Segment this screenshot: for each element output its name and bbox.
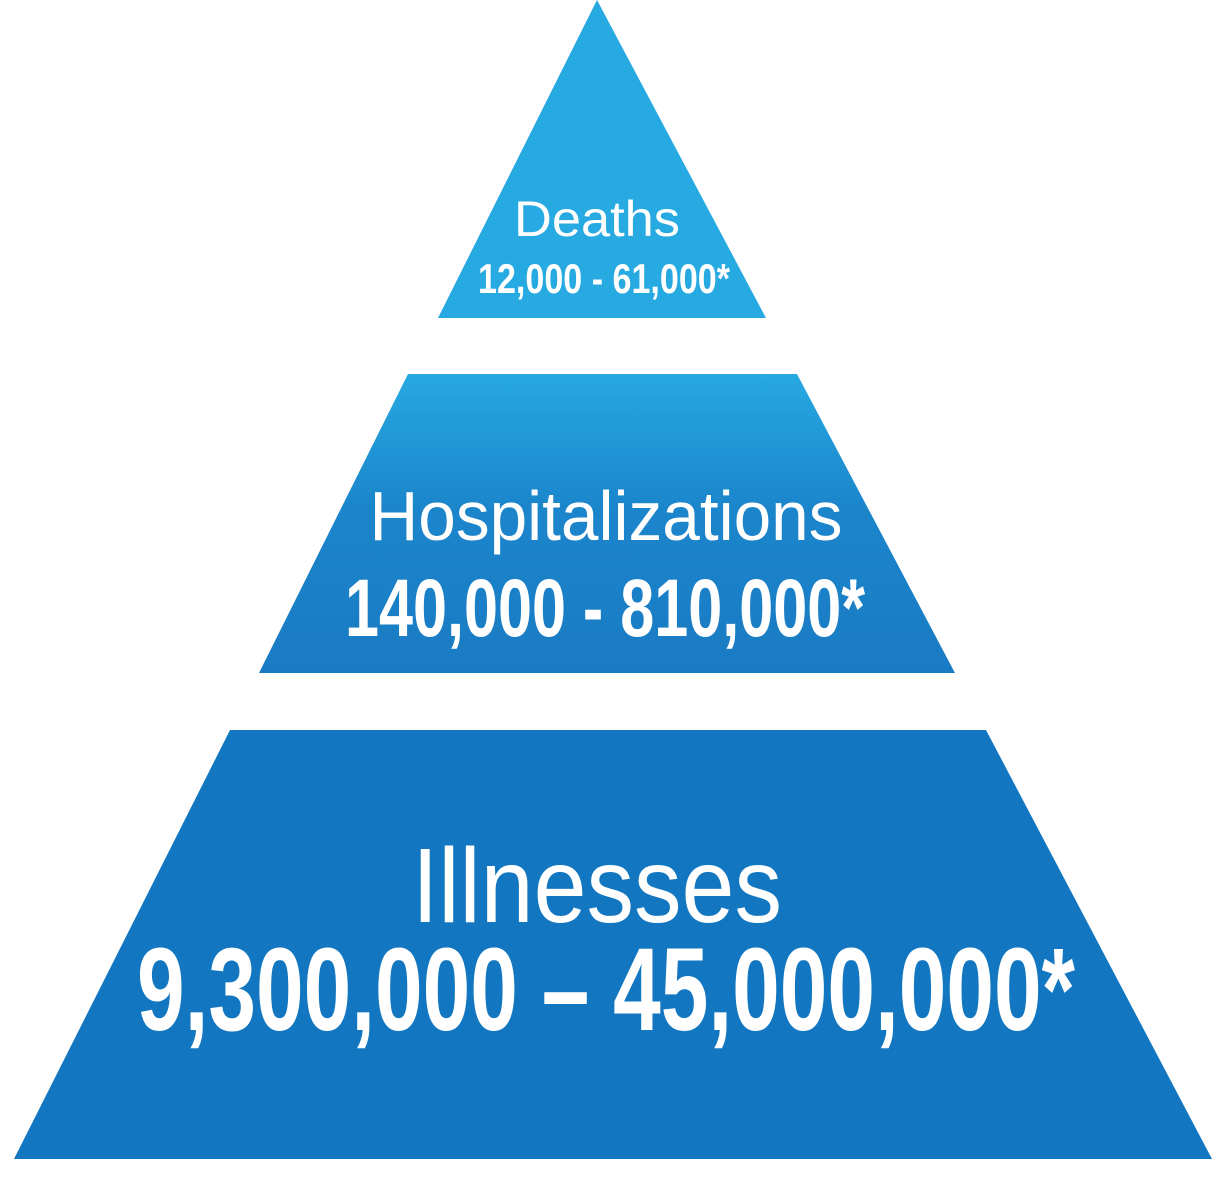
heading: hospitalizations: Hospitalizations bbox=[370, 477, 842, 555]
number: deaths: 12,000 - 61,000* bbox=[478, 255, 731, 302]
heading: illnesses: Illnesses bbox=[412, 827, 782, 945]
number: hospitalizations: 140,000 - 810,000* bbox=[345, 563, 865, 654]
heading: deaths: Deaths bbox=[514, 191, 680, 247]
panel: illnesses bbox=[14, 730, 1212, 1159]
panel: hospitalizations bbox=[259, 374, 955, 673]
panel: deaths bbox=[438, 0, 766, 318]
